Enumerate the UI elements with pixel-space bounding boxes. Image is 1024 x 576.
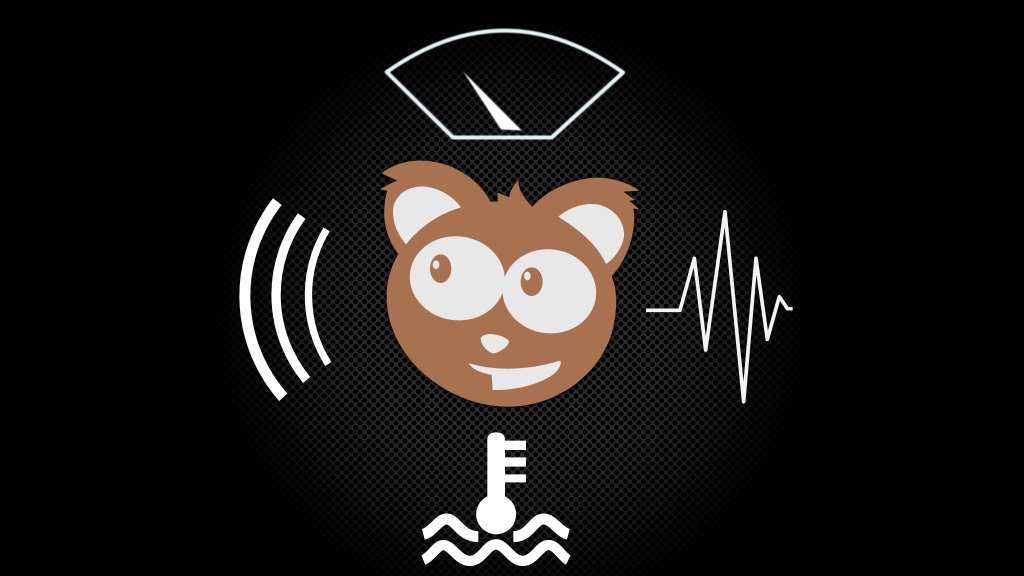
right inner ear	[558, 204, 624, 264]
outer sound arc	[245, 202, 283, 397]
mouth with tooth	[469, 361, 561, 390]
nose	[481, 334, 509, 353]
icon: coolant temperature	[423, 432, 568, 561]
bear head and ears	[380, 161, 639, 407]
right pupil	[521, 267, 543, 296]
gauge outline	[387, 31, 623, 138]
right highlight	[524, 272, 531, 280]
lower wave	[423, 544, 568, 561]
inner sound arc	[308, 229, 328, 364]
left highlight	[433, 260, 439, 269]
left inner ear	[393, 186, 461, 244]
right eye	[497, 243, 602, 339]
icon: sound waves	[245, 202, 328, 397]
upper wave	[423, 519, 568, 537]
icon: heartbeat pulse line	[646, 212, 793, 402]
middle sound arc	[276, 216, 307, 380]
icon: speedometer gauge	[387, 31, 623, 138]
left eye	[404, 230, 510, 327]
thermometer	[476, 432, 526, 534]
bear mascot	[380, 161, 639, 407]
gauge needle	[464, 72, 522, 130]
left pupil	[430, 254, 451, 283]
